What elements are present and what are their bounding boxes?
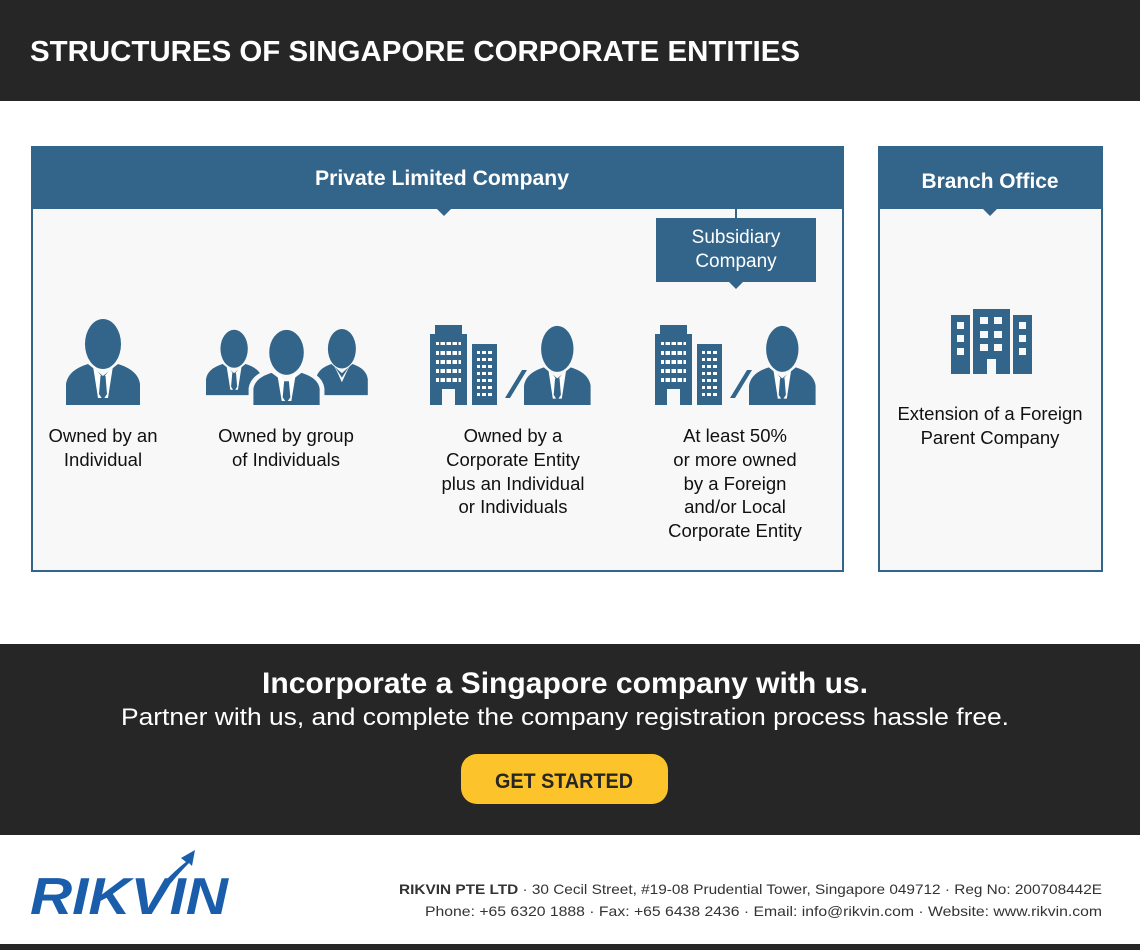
icon: individual xyxy=(66,319,140,405)
text: owned by group: Owned by group xyxy=(218,425,354,446)
logo: rikvin: RIKVIN xyxy=(30,868,230,926)
icon: corporate entity plus individual xyxy=(430,325,591,405)
text: extension of foreign parent: Extension of a Foreign xyxy=(897,403,1083,424)
footer xyxy=(0,835,1140,950)
icon: office building xyxy=(951,309,1032,374)
text: extension of foreign parent xyxy=(897,403,1083,448)
logo: rikvin xyxy=(30,850,230,926)
text: owned by an individual: Owned by an xyxy=(48,425,158,446)
button: get started: GET STARTED xyxy=(495,770,633,793)
icon: foreign corporate entity xyxy=(655,325,816,405)
text: at least 50% xyxy=(668,425,803,541)
text: owned by an individual xyxy=(48,425,158,470)
panel: private limited company xyxy=(31,146,844,571)
title: STRUCTURES OF SINGAPORE CORPORATE ENTITIES xyxy=(30,36,800,68)
text: at least 50%: At least 50% xyxy=(683,425,787,446)
panel heading: Private Limited Company xyxy=(315,167,569,190)
footer address: Phone: +65 6320 1888 · Fax: +65 6438 2436 · Email: info@rikvin.com · Website: www.rikvin.com xyxy=(425,903,1102,919)
footer address xyxy=(399,881,1102,919)
subsidiary company box: Subsidiary xyxy=(692,227,781,248)
panel heading xyxy=(878,146,1103,216)
text: corporate entity plus individual: Owned by a xyxy=(464,425,563,446)
cta subtext: Partner with us, and complete the company registration process hassle free. xyxy=(121,704,1009,731)
text: at least 50%: Corporate Entity xyxy=(668,520,803,541)
text: owned by an individual: Individual xyxy=(64,449,142,470)
panel heading: Branch Office xyxy=(922,170,1058,193)
icon: group of individuals xyxy=(206,329,368,407)
text: owned by group: of Individuals xyxy=(232,449,340,470)
text: at least 50%: and/or Local xyxy=(684,496,786,517)
text: corporate entity plus individual: or Individuals xyxy=(458,496,568,517)
text: corporate entity plus individual xyxy=(442,425,584,517)
text: corporate entity plus individual: plus an Individual xyxy=(442,473,584,494)
cta band xyxy=(0,644,1140,835)
subsidiary company box xyxy=(656,209,816,289)
text: corporate entity plus individual: Corporate Entity xyxy=(446,449,581,470)
button: get started xyxy=(461,754,668,804)
subsidiary company box: Company xyxy=(695,251,777,272)
panel: branch office xyxy=(878,146,1103,571)
cta heading: Incorporate a Singapore company with us. xyxy=(262,667,868,700)
text: owned by group xyxy=(218,425,354,470)
text: at least 50%: by a Foreign xyxy=(684,473,786,494)
text: at least 50%: or more owned xyxy=(673,449,797,470)
header bar xyxy=(0,0,1140,101)
panel heading xyxy=(31,146,844,216)
footer address: RIKVIN PTE LTD · 30 Cecil Street, #19-08 Prudential Tower, Singapore 049712 · Reg No: 200708442E xyxy=(399,881,1102,897)
text: extension of foreign parent: Parent Company xyxy=(921,427,1060,448)
